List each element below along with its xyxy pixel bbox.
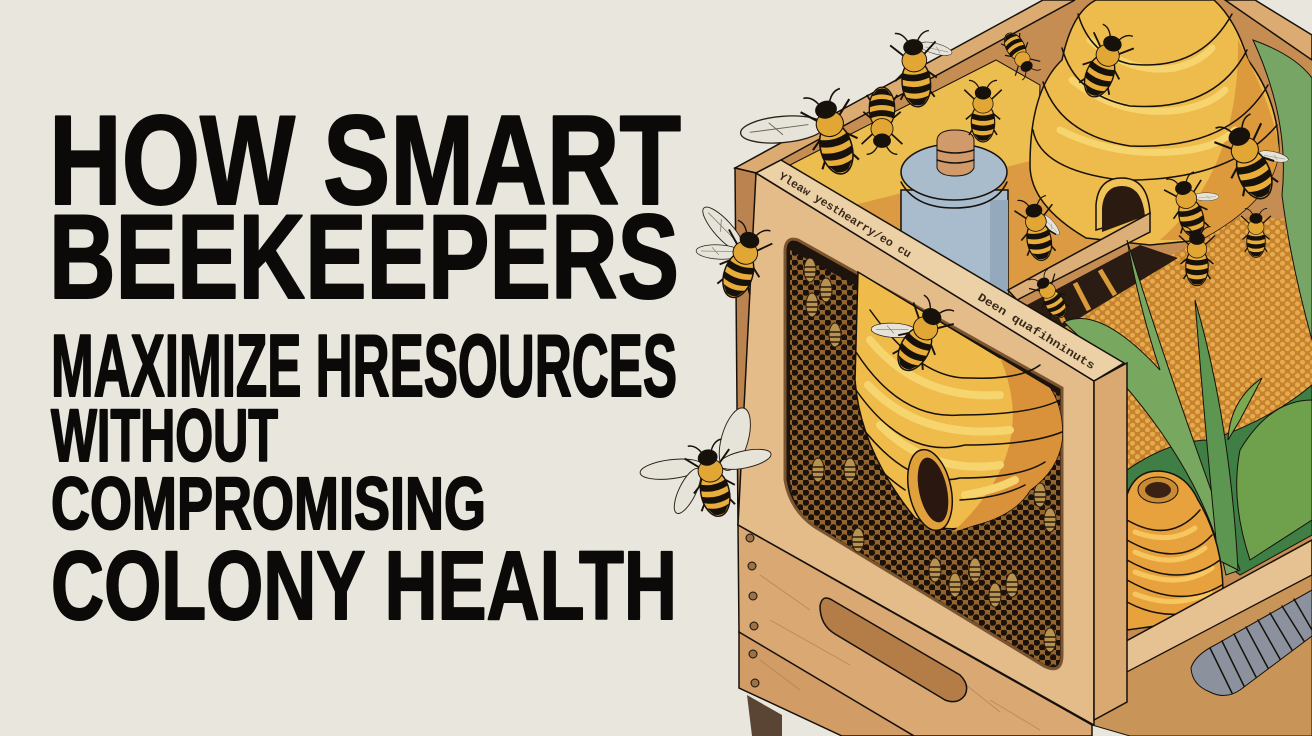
- right outer face: [1092, 575, 1312, 736]
- right post: [1094, 363, 1127, 720]
- title: [49, 89, 681, 640]
- bee 13: [629, 398, 781, 531]
- cork: [937, 130, 974, 176]
- left side face: [735, 168, 756, 530]
- dark bee top: [995, 26, 1044, 82]
- grey bellows: [1191, 590, 1312, 696]
- screws: [746, 534, 759, 687]
- dark bee partition: [1025, 267, 1076, 324]
- front frame: [738, 173, 1094, 725]
- hand slot: [820, 598, 967, 702]
- bar label right: Deen quafihninuts: [975, 291, 1097, 373]
- title line 2: BEEKEEPERS: [49, 190, 679, 324]
- right rim: [1095, 540, 1312, 682]
- hive box: [735, 0, 1312, 736]
- title line 5: COMPROMISING: [51, 462, 486, 545]
- top bar: [756, 160, 1124, 381]
- wood grain: [760, 575, 1040, 730]
- bee 8: [1179, 226, 1215, 286]
- large skep hive: [1030, 0, 1279, 245]
- partition strip: [1008, 213, 1150, 300]
- bee 3: [889, 29, 958, 109]
- dark stripes under partition: [1025, 245, 1178, 330]
- legs: [747, 695, 782, 736]
- green plants: [1064, 240, 1312, 575]
- bee 7: [1162, 167, 1228, 242]
- interior back: [735, 0, 1312, 725]
- grey cylinder container: [901, 130, 1008, 330]
- title line 4: WITHOUT: [51, 394, 278, 477]
- bee 5: [1071, 22, 1138, 104]
- yellow slab: [790, 60, 1040, 245]
- bee wings: [629, 398, 780, 524]
- front lower boards: [738, 525, 1092, 736]
- small orange skep: [1127, 471, 1223, 630]
- central skep hive: [855, 272, 1062, 534]
- comb tray: [1066, 217, 1312, 475]
- title line 1: HOW SMART: [49, 89, 681, 231]
- bar label left: Yleaw yesthearry/eo cu: [776, 170, 913, 261]
- bee 10: [1013, 194, 1066, 264]
- bee 1: [734, 87, 867, 197]
- right leaf: [1253, 40, 1312, 340]
- bees in comb: [804, 258, 1056, 652]
- bee 4: [964, 80, 1002, 142]
- bee 11: [676, 199, 779, 304]
- interior floor: [854, 160, 1100, 296]
- hive highlights: [1060, 40, 1235, 152]
- bee 6: [1210, 106, 1301, 207]
- window: [785, 239, 1062, 669]
- skep entrance: [901, 446, 959, 534]
- title line 6: COLONY HEALTH: [51, 531, 677, 640]
- title line 3: MAXIMIZE HRESOURCES: [51, 316, 677, 415]
- bee 9: [1241, 208, 1271, 257]
- bee 12: [859, 279, 959, 380]
- back rim: [735, 0, 1312, 173]
- bee 2: [862, 87, 902, 154]
